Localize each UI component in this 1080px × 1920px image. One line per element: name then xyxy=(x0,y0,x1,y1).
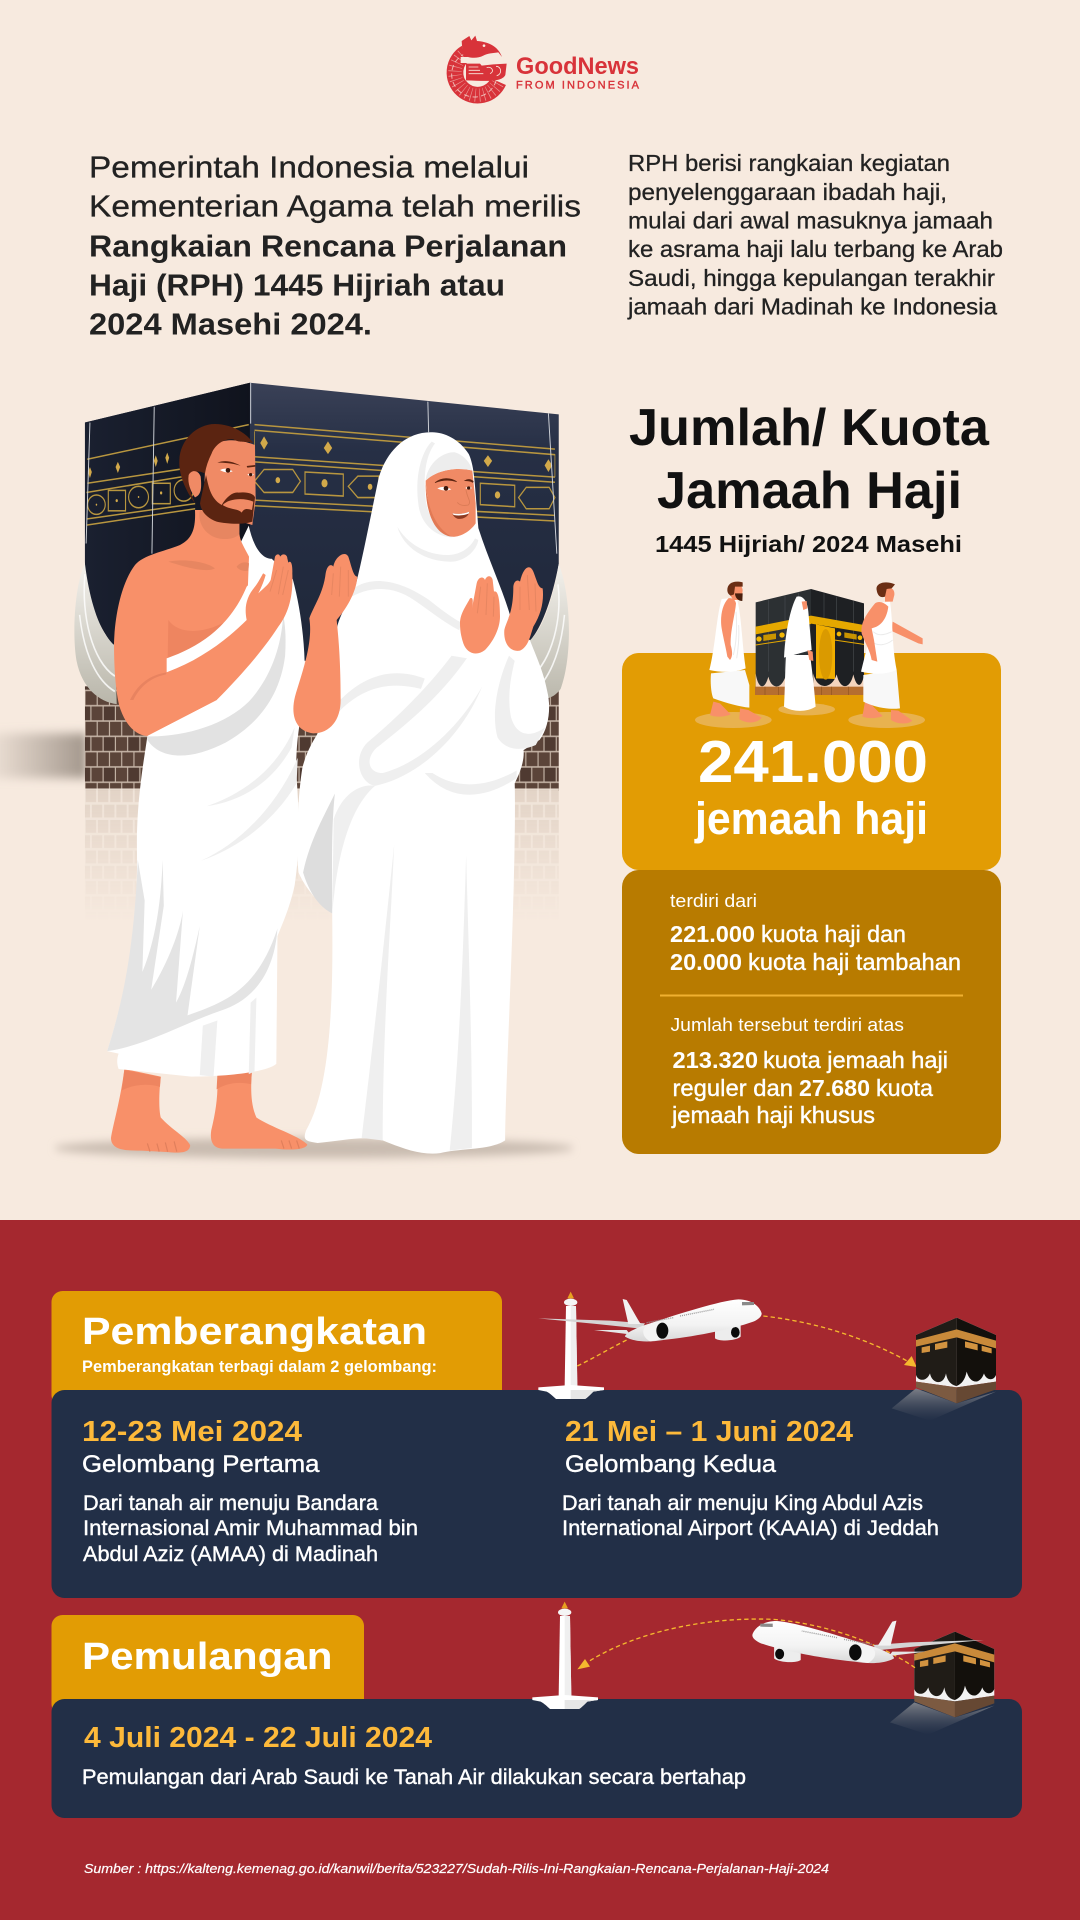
woman's right hand xyxy=(504,567,543,651)
text: jumlah tersebut: Jumlah tersebut terdiri atas xyxy=(670,1015,904,1035)
text block: intro heading: Kementerian Agama telah merilis xyxy=(89,188,581,224)
illustration: Kaaba with praying pilgrims xyxy=(0,383,574,1158)
icon: Kaaba miniature xyxy=(890,1632,994,1735)
column: first wave: Abdul Aziz (AMAA) di Madinah xyxy=(83,1543,378,1566)
woman's face and hands xyxy=(397,442,543,653)
text: quota lines: 221.000 xyxy=(670,921,755,947)
column: second wave: Dari tanah air menuju King Abdul Azis xyxy=(562,1492,923,1515)
woman's left hand xyxy=(460,576,500,653)
logo: GoodNews from Indonesia xyxy=(452,36,640,97)
man's white ihram cloth xyxy=(107,526,305,1077)
icon: airplane xyxy=(752,1621,984,1663)
text block: RPH description: mulai dari awal masuknya jamaah xyxy=(628,208,993,234)
text block: RPH description: ke asrama haji lalu terbang ke Arab xyxy=(628,236,1003,262)
text block: RPH description: Saudi, hingga kepulangan terakhir xyxy=(628,265,995,291)
heading: Pemberangkatan: Pemberangkatan xyxy=(82,1311,427,1353)
return description: Pemulangan dari Arab Saudi ke Tanah Air dilakukan secara bertahap xyxy=(82,1766,746,1789)
text block: RPH description: jamaah dari Madinah ke Indonesia xyxy=(627,294,998,320)
text: quota lines xyxy=(670,921,961,975)
man's neck shade xyxy=(199,510,239,539)
pilgrim: left man xyxy=(709,582,762,722)
column: second wave: International Airport (KAAIA) di Jeddah xyxy=(562,1517,939,1540)
background: cream upper section xyxy=(0,0,1080,1220)
pilgrim: right man xyxy=(861,582,923,723)
text: regular and special quota: reguler dan xyxy=(672,1075,793,1101)
man's upper body xyxy=(114,424,357,736)
logo tagline: FROM INDONESIA xyxy=(516,80,640,92)
panel: departure details xyxy=(52,1390,1022,1598)
logo wordmark: GoodNews xyxy=(516,53,639,80)
subheading: gelombang: Pemberangkatan terbagi dalam 2 gelombang: xyxy=(82,1357,437,1376)
column: second wave: 21 Mei – 1 Juni 2024 xyxy=(565,1416,853,1448)
text: regular and special quota: jemaah haji khusus xyxy=(671,1102,875,1128)
heading: Jumlah Kuota Jamaah Haji: Jumlah/ Kuota xyxy=(629,399,990,457)
source citation: Sumber : https://kalteng.kemenag.go.id/kanwil/berita/523227/Sudah-Rilis-Ini-Rangkaian-Rencana-Perjalanan-Haji-2024 xyxy=(84,1861,829,1876)
text block: intro heading: Pemerintah Indonesia melalui xyxy=(89,150,529,184)
illustration: pilgrims walking around Kaaba xyxy=(695,582,925,728)
column: first wave: Internasional Amir Muhammad bin xyxy=(83,1517,418,1540)
heading: Pemulangan: Pemulangan xyxy=(82,1636,332,1678)
text: quota lines: 20.000 xyxy=(670,949,742,975)
kaaba building xyxy=(74,383,569,921)
text: regular and special quota: 27.680 xyxy=(799,1075,870,1101)
column: first wave: Gelombang Pertama xyxy=(82,1451,320,1478)
panel: quota breakdown xyxy=(622,870,1001,1154)
subheading: year: 1445 Hijriah/ 2024 Masehi xyxy=(655,531,962,557)
ground shadow xyxy=(54,1138,574,1158)
mini kaaba xyxy=(755,589,864,695)
kaaba gold calligraphy band xyxy=(86,425,555,525)
man's feet xyxy=(111,1069,307,1153)
text: terdiri dari: terdiri dari xyxy=(670,891,757,911)
arrow: dotted route xyxy=(577,1316,908,1366)
text: regular and special quota xyxy=(671,1047,948,1128)
icon: Monas monument xyxy=(532,1602,598,1709)
icon: Kaaba miniature xyxy=(892,1318,996,1421)
column: first wave: Dari tanah air menuju Bandara xyxy=(83,1492,378,1515)
text: regular and special quota: kuota jemaah haji xyxy=(763,1047,948,1073)
panel: total quota xyxy=(622,653,1001,870)
arrow head xyxy=(904,1356,917,1367)
text: regular and special quota: 213.320 xyxy=(672,1047,758,1073)
column: second wave xyxy=(562,1416,939,1540)
ground ellipses xyxy=(695,703,925,728)
kaaba shadow xyxy=(0,733,86,778)
text block: intro heading: Haji (RPH) 1445 Hijriah atau xyxy=(89,268,505,302)
man's forearm and praying hand xyxy=(120,554,292,736)
text block: RPH description xyxy=(627,150,1003,320)
panel number: 241.000: 241.000 xyxy=(698,729,928,795)
woman's face xyxy=(426,452,476,537)
woman's collar fold xyxy=(397,527,478,562)
illustration: departure route xyxy=(538,1292,996,1421)
icon: airplane xyxy=(538,1299,762,1341)
column: first wave xyxy=(82,1416,418,1566)
heading: Jumlah Kuota Jamaah Haji xyxy=(629,399,990,557)
text: quota lines: kuota haji dan xyxy=(761,921,906,947)
text: regular and special quota: kuota xyxy=(876,1075,934,1101)
panel: return details xyxy=(52,1699,1022,1818)
panel label: jemaah haji: jemaah haji xyxy=(694,793,928,844)
text block: RPH description: penyelenggaraan ibadah haji, xyxy=(628,179,947,205)
pilgrim: woman xyxy=(784,596,816,711)
column: first wave: 12-23 Mei 2024 xyxy=(82,1416,302,1448)
heading: Jumlah Kuota Jamaah Haji: Jamaah Haji xyxy=(657,462,962,520)
text: quota lines: kuota haji tambahan xyxy=(748,949,961,975)
text block: intro heading: Rangkaian Rencana Perjalanan xyxy=(89,228,567,264)
man's sash xyxy=(167,577,257,672)
man's head xyxy=(179,424,256,525)
panel: Pemulangan tab xyxy=(52,1615,364,1715)
woman's inner hood xyxy=(417,442,460,537)
column: second wave: Gelombang Kedua xyxy=(565,1451,777,1478)
background: red lower section xyxy=(0,1220,1080,1920)
man's other arm and praying hand xyxy=(293,554,357,733)
text block: intro heading: 2024 Masehi 2024. xyxy=(89,306,372,342)
return date: 4 Juli 2024 - 22 Juli 2024 xyxy=(84,1722,432,1754)
illustration: return route xyxy=(532,1602,994,1735)
text block: intro heading xyxy=(89,150,581,342)
icon: Monas monument xyxy=(538,1292,604,1399)
panel: Pemberangkatan tab xyxy=(52,1291,502,1406)
man's torso xyxy=(114,510,249,736)
text block: RPH description: RPH berisi rangkaian kegiatan xyxy=(628,150,950,176)
arrow: dotted return route xyxy=(577,1619,915,1669)
icon: garuda ring xyxy=(452,36,507,97)
woman's white robe xyxy=(297,432,549,1154)
